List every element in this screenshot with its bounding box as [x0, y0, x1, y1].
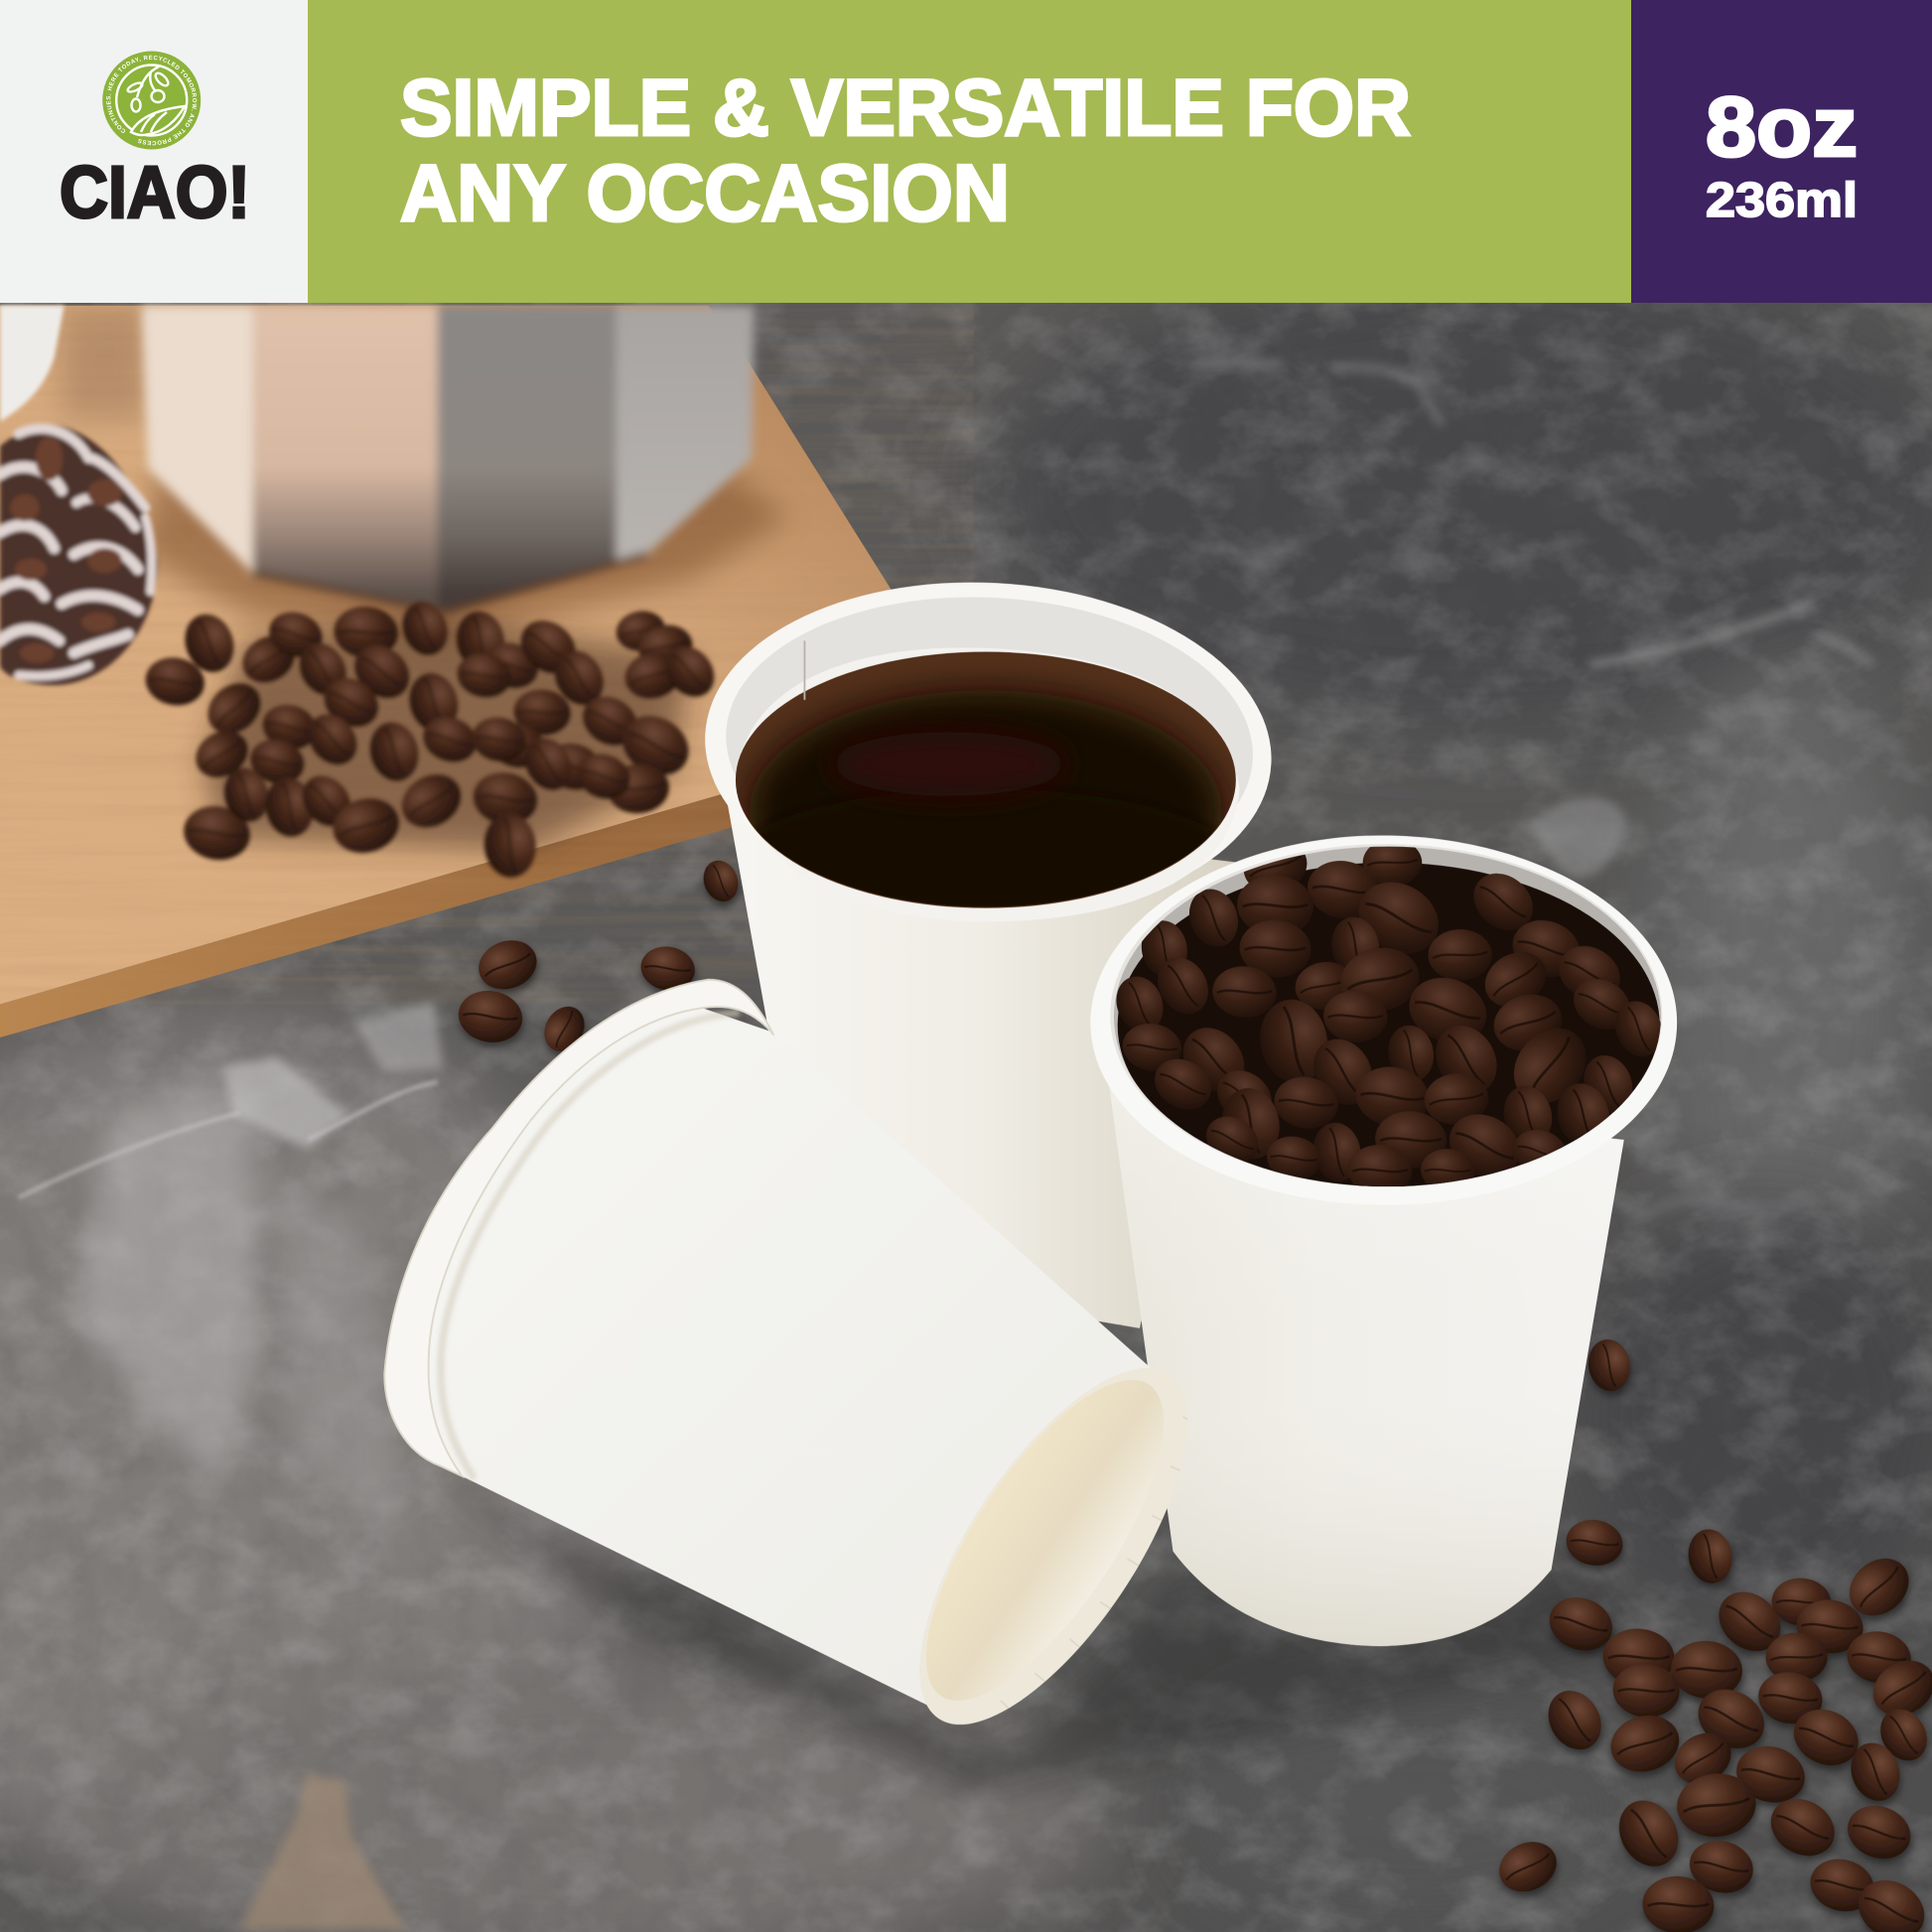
coffee beans on board: [142, 596, 724, 880]
olive branch: [126, 67, 170, 111]
milk bottle: [0, 306, 65, 421]
paper cup lying on its side: [383, 979, 1187, 1725]
paper cup with coffee beans: [1084, 826, 1688, 1646]
title line two: ANY OCCASION: [400, 149, 1010, 238]
lying cup body: [429, 1008, 1165, 1713]
field: [131, 106, 185, 135]
size panel: [1631, 0, 1932, 303]
logo panel: [0, 0, 308, 303]
lying cup rim shadow: [441, 1013, 740, 1478]
CIAO wordmark: CIAO!: [60, 151, 250, 233]
cup shadows on marble: [419, 1466, 1626, 1799]
paper cup with black coffee: [697, 568, 1280, 1328]
coffee beans scattered on marble: [1491, 1515, 1932, 1932]
loose beans on marble: [455, 856, 1634, 1394]
rust stain on marble: [240, 1774, 407, 1930]
title line one: SIMPLE & VERSATILE FOR: [400, 64, 1411, 153]
coffee surface: [736, 652, 1236, 908]
millilitres: 236ml: [1706, 174, 1858, 227]
pinecone: [0, 425, 158, 685]
badge ring text: CONTINUES. HERE TODAY, RECYCLED TOMORROW. AND THE PROCESS: [106, 56, 197, 145]
beans filling cup: [1114, 846, 1661, 1187]
wooden board: [0, 306, 973, 1037]
logo badge: [102, 52, 201, 149]
moka pot: [142, 306, 758, 625]
marble veins and reflections: [19, 363, 1872, 1930]
ounces: 8oz: [1706, 80, 1858, 175]
open end of lying cup: [919, 1368, 1187, 1725]
lying cup rim: [384, 980, 773, 1476]
title banner: [308, 0, 1631, 303]
